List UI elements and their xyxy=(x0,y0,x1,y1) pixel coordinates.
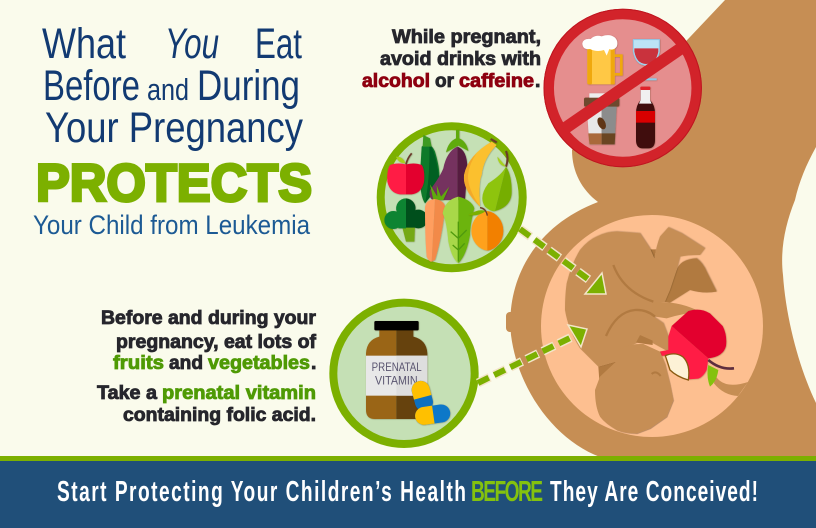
fruits, vegetables and vitamin advice text: pregnancy, eat lots of xyxy=(116,331,316,353)
icon: orange xyxy=(468,208,503,251)
icon: broccoli xyxy=(384,198,428,242)
fruits, vegetables and vitamin advice text: Take a xyxy=(97,382,157,404)
arrow: prenatal vitamin to fetus xyxy=(478,325,587,383)
bottom banner: They Are Conceived! xyxy=(550,476,758,508)
label text xyxy=(372,361,422,387)
fruits, vegetables and vitamin advice text: Before and during your xyxy=(101,307,316,329)
title: and xyxy=(147,72,189,107)
fruits, vegetables and vitamin advice text: and xyxy=(169,352,203,374)
alcohol and caffeine warning text: or xyxy=(435,70,454,92)
fruits and vegetables circle xyxy=(381,126,523,268)
bottom banner xyxy=(0,456,816,528)
fruits, vegetables and vitamin advice text: . xyxy=(311,352,316,374)
alcohol and caffeine warning text: While pregnant, xyxy=(392,26,541,48)
icon: lettuce xyxy=(443,197,474,263)
fruits, vegetables and vitamin advice text: fruits xyxy=(113,352,164,374)
prenatal vitamin circle xyxy=(333,303,475,444)
alcohol and caffeine warning text xyxy=(362,26,541,92)
icon: pills xyxy=(410,379,451,426)
icon: apple xyxy=(387,153,424,194)
fruits and vegetables icons xyxy=(384,130,512,263)
arrow: fruits and vegetables to fetus xyxy=(520,229,606,294)
title: Before xyxy=(43,62,140,110)
icon: beer mug xyxy=(582,35,621,84)
icon: pear xyxy=(482,151,512,211)
icon: wine glass xyxy=(633,40,659,80)
title: You xyxy=(165,20,219,68)
title: Eat xyxy=(255,20,302,68)
fruits, vegetables and vitamin advice text: containing folic acid. xyxy=(123,404,316,426)
title: PROTECTS xyxy=(36,154,312,213)
icon: eggplant xyxy=(430,130,468,200)
fetus head xyxy=(595,344,673,433)
bottom banner: Start Protecting Your Children’s Health xyxy=(57,476,466,508)
title xyxy=(33,20,312,240)
apple xyxy=(659,310,726,379)
icon: banana xyxy=(464,139,497,207)
alcohol and caffeine warning text: . xyxy=(535,70,540,92)
alcohol and caffeine warning text: caffeine xyxy=(459,70,534,92)
uterus xyxy=(541,215,763,437)
icon: carrot xyxy=(425,184,449,262)
alcohol and caffeine warning text: alcohol xyxy=(362,70,430,92)
no alcohol or caffeine sign xyxy=(544,9,701,167)
fruits, vegetables and vitamin advice text: prenatal vitamin xyxy=(162,382,316,404)
fruits, vegetables and vitamin advice text: vegetables xyxy=(208,352,310,374)
alcohol and caffeine warning text: avoid drinks with xyxy=(380,48,541,70)
icon: cola bottle xyxy=(636,87,655,148)
icon: cucumber xyxy=(420,135,439,203)
pregnant body silhouette xyxy=(506,0,816,457)
title: What xyxy=(42,20,126,68)
fruits, vegetables and vitamin advice text xyxy=(97,307,316,426)
title: Your Child from Leukemia xyxy=(33,210,311,240)
label text: PRENATAL xyxy=(372,361,422,374)
icon: vitamin bottle xyxy=(366,321,427,419)
drinks icons xyxy=(582,35,659,148)
title: During xyxy=(197,62,300,110)
icon: coffee cup xyxy=(584,93,619,144)
fetus xyxy=(565,227,748,433)
title: Your Pregnancy xyxy=(45,104,303,152)
bottom banner: BEFORE xyxy=(471,476,543,508)
label text: VITAMIN xyxy=(375,374,418,387)
